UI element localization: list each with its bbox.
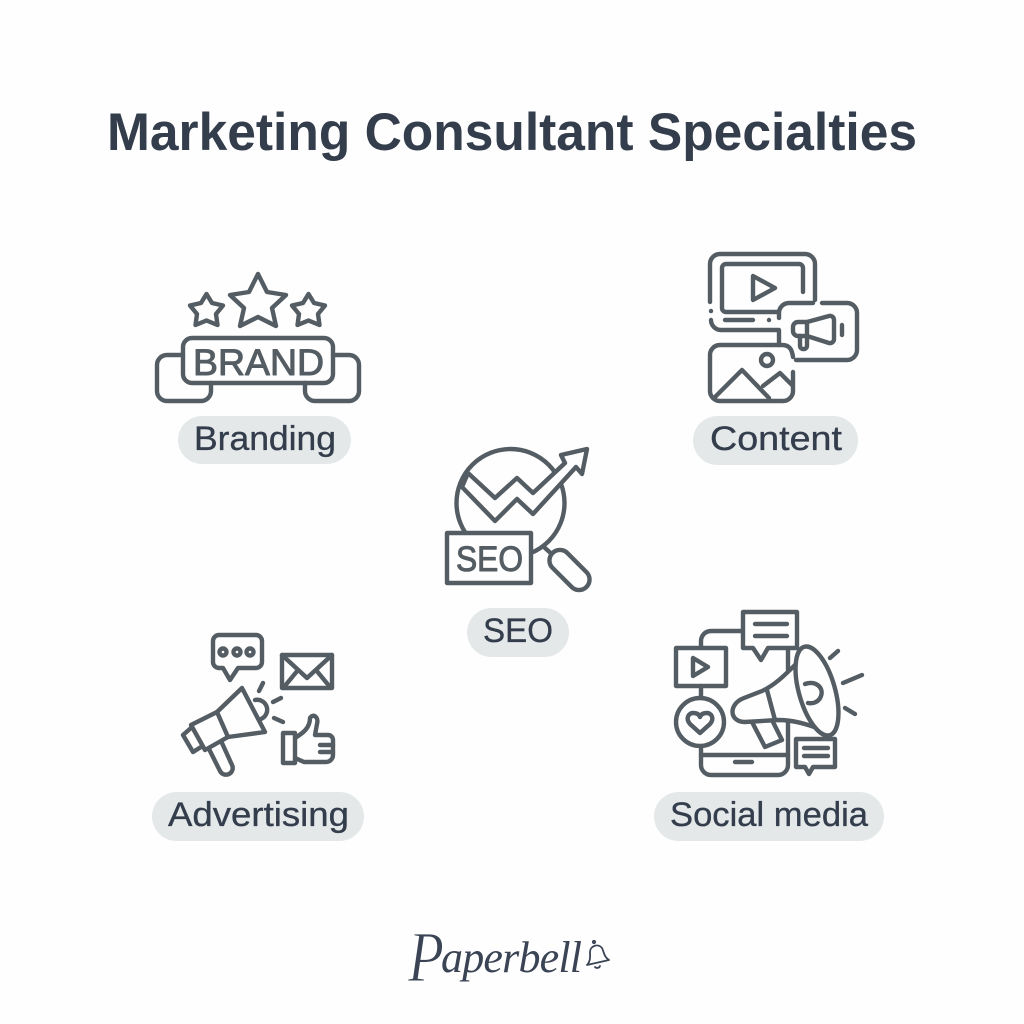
icon: content media <box>710 254 857 401</box>
icon: brand banner with stars <box>157 274 359 401</box>
label: Content: Content <box>710 420 843 458</box>
icon: bell <box>587 941 609 968</box>
label: Social media: Social media <box>670 796 868 834</box>
logo: Paperbell: aperbell <box>441 933 582 982</box>
logo: Paperbell: P <box>407 917 444 997</box>
label: Advertising <box>152 792 364 841</box>
label: Content <box>693 416 858 465</box>
title: Marketing Consultant Specialties <box>107 103 917 162</box>
icon: advertising megaphone <box>183 635 333 775</box>
label: SEO <box>467 608 569 657</box>
icon: SEO magnifier <box>447 449 594 594</box>
label: SEO: SEO <box>483 612 553 650</box>
logo: Paperbell <box>407 917 609 997</box>
icon: social media phone <box>676 612 862 775</box>
label: Branding <box>178 416 351 464</box>
icon: SEO magnifier: SEO <box>456 540 523 579</box>
icon: brand banner with stars: BRAND <box>193 342 324 383</box>
label: Social media <box>654 792 884 841</box>
label: Advertising: Advertising <box>168 796 349 834</box>
label: Branding: Branding <box>194 420 336 458</box>
